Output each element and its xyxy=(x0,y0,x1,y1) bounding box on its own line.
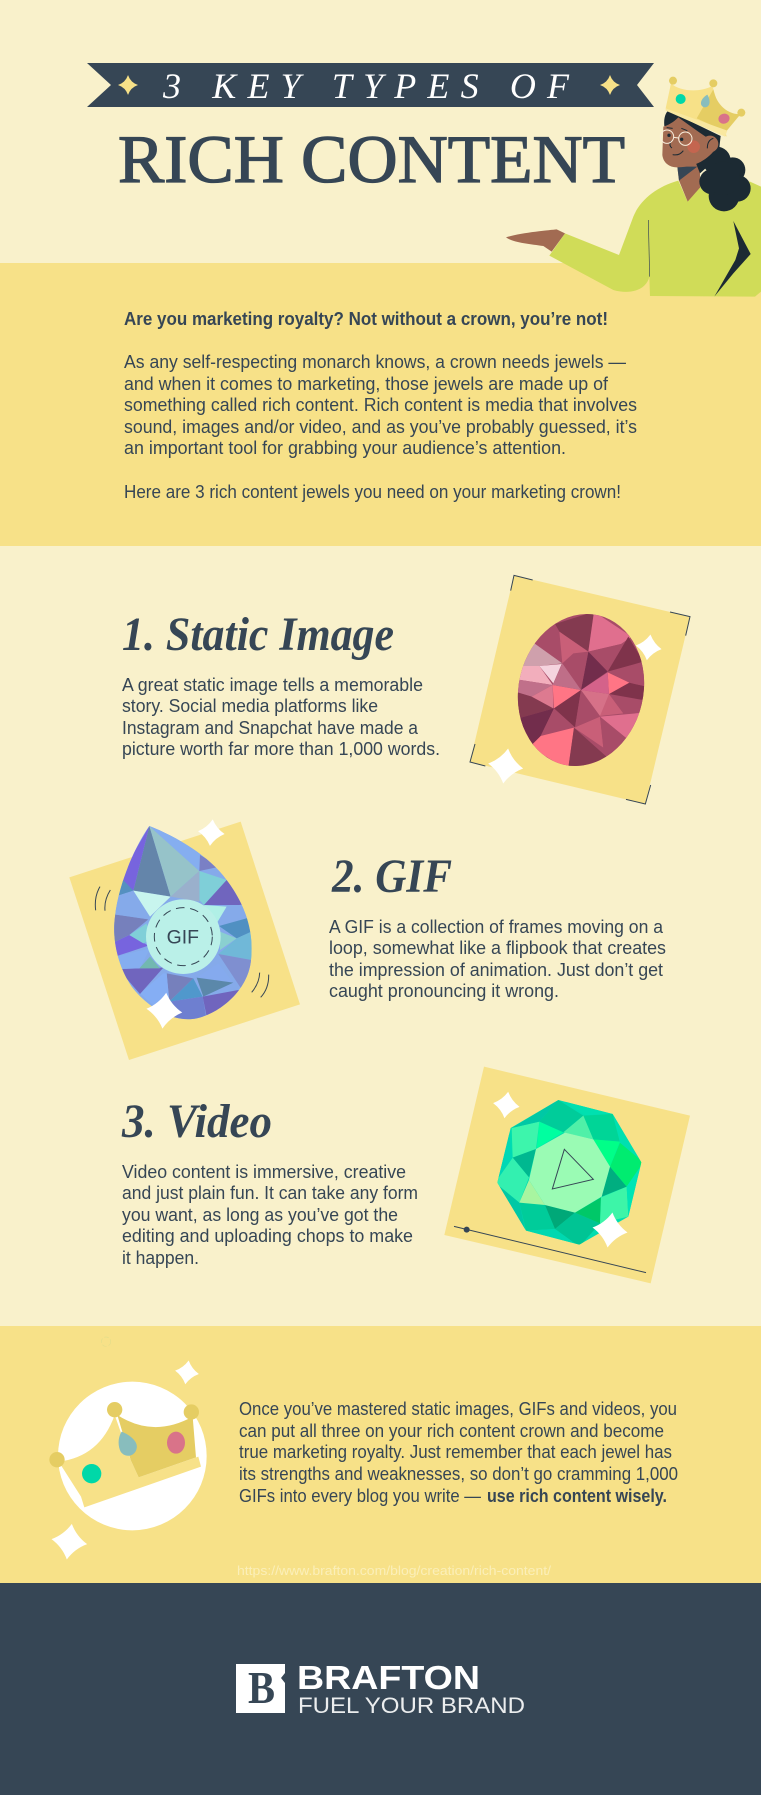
text: video xyxy=(122,1162,418,1268)
jewels xyxy=(119,1432,137,1456)
crown balls xyxy=(49,1452,65,1467)
illustration: emerald on card xyxy=(444,1067,690,1283)
intro text: As any self-respecting monarch knows, a crown needs jewels — xyxy=(124,352,626,372)
crown xyxy=(666,83,727,137)
heading: 2. GIF: 2. GIF xyxy=(331,850,452,903)
source url: https://www.brafton.com/blog/creation/rich-content/ xyxy=(237,1563,551,1578)
text: closing paragraph: Once you’ve mastered static images, GIFs and videos, you xyxy=(239,1399,677,1419)
neck xyxy=(677,163,700,202)
panel: footer xyxy=(0,1583,761,1795)
card xyxy=(69,822,300,1060)
text: video: and just plain fun. It can take any form xyxy=(122,1183,418,1203)
play triangle xyxy=(552,1149,593,1189)
illustration: GIF teardrop gem on card xyxy=(69,818,300,1060)
text: static image: story. Social media platforms like xyxy=(122,696,378,716)
text: closing paragraph: its strengths and weaknesses, so don’t go cramming 1,000 xyxy=(239,1464,678,1484)
text: video: you want, as long as you’ve got the xyxy=(122,1205,398,1225)
logo: Brafton: FUEL YOUR BRAND xyxy=(298,1693,525,1718)
text: closing paragraph: can put all three on your rich content crown and become xyxy=(239,1421,664,1441)
crown dark xyxy=(117,1415,196,1477)
illustration: ruby on card xyxy=(470,575,690,804)
text: video: editing and uploading chops to make xyxy=(122,1226,413,1246)
sparkles xyxy=(491,1090,521,1120)
intro text: Are you marketing royalty? Not without a crown, you’re not! xyxy=(124,309,608,329)
GIF label: GIF xyxy=(167,927,199,948)
hand xyxy=(506,229,565,252)
ruby xyxy=(518,614,644,766)
text: static image: Instagram and Snapchat have made a xyxy=(122,718,419,738)
sparkles xyxy=(173,1359,201,1386)
text: closing paragraph xyxy=(239,1399,678,1506)
gem xyxy=(114,826,252,1020)
intro text: an important tool for grabbing your audience’s attention. xyxy=(124,438,566,458)
text: GIF: A GIF is a collection of frames moving on a xyxy=(329,917,664,937)
ear xyxy=(702,136,718,152)
text: closing paragraph: true marketing royalty. Just remember that each jewel has xyxy=(239,1442,672,1462)
text: static image: A great static image tells a memorable xyxy=(122,675,423,695)
eyes and mouth xyxy=(667,134,671,137)
center circle xyxy=(146,899,221,974)
video scrubber xyxy=(454,1226,646,1273)
text: closing paragraph: GIFs into every blog you write — xyxy=(239,1486,481,1506)
sparkles xyxy=(634,633,663,662)
illustration: woman with crown xyxy=(506,77,761,297)
hair xyxy=(664,111,751,211)
logo: Brafton: BRAFTON xyxy=(297,1659,480,1696)
panel: intro band xyxy=(0,263,761,546)
motion lines xyxy=(95,887,269,997)
card xyxy=(444,1067,690,1283)
text: GIF: the impression of animation. Just don’t get xyxy=(329,960,663,980)
glasses xyxy=(660,130,692,145)
intro text xyxy=(124,309,637,502)
logo: Brafton xyxy=(236,1659,525,1718)
text: GIF: caught pronouncing it wrong. xyxy=(329,981,559,1001)
intro text: sound, images and/or video, and as you’ve probably guessed, it’s xyxy=(124,417,637,437)
sweater folds xyxy=(714,221,751,297)
text: GIF: loop, somewhat like a flipbook that creates xyxy=(329,938,666,958)
crop marks xyxy=(470,575,690,804)
card xyxy=(470,575,690,804)
text: video: it happen. xyxy=(122,1248,199,1268)
logo: Brafton: B xyxy=(248,1663,275,1713)
heading: 3. Video: 3. Video xyxy=(121,1095,272,1148)
intro text: and when it comes to marketing, those jewels are made up of xyxy=(124,374,609,394)
sweater xyxy=(549,181,761,297)
banner: 3 key types of: 3 KEY TYPES OF xyxy=(162,66,570,106)
white circle xyxy=(58,1382,207,1530)
text: closing paragraph: use rich content wisely. xyxy=(487,1486,667,1506)
title: RICH CONTENT xyxy=(118,121,625,197)
heading: 1. Static Image: 1. Static Image xyxy=(122,608,394,661)
emerald xyxy=(497,1100,642,1245)
text: GIF xyxy=(329,917,666,1001)
intro text: something called rich content. Rich content is media that involves xyxy=(124,395,637,415)
intro text: Here are 3 rich content jewels you need on your marketing crown! xyxy=(124,482,621,502)
faint ring xyxy=(101,1337,111,1346)
face xyxy=(662,117,713,167)
crown pale xyxy=(59,1415,201,1507)
text: static image: picture worth far more than 1,000 words. xyxy=(122,739,440,759)
panel: closing band xyxy=(0,1326,761,1583)
illustration: crown in white circle xyxy=(49,1337,207,1562)
sparkles xyxy=(197,818,226,847)
banner: 3 key types of xyxy=(87,63,654,107)
text: static image xyxy=(122,675,440,759)
text: video: Video content is immersive, creative xyxy=(122,1162,406,1182)
cheek xyxy=(687,140,700,153)
